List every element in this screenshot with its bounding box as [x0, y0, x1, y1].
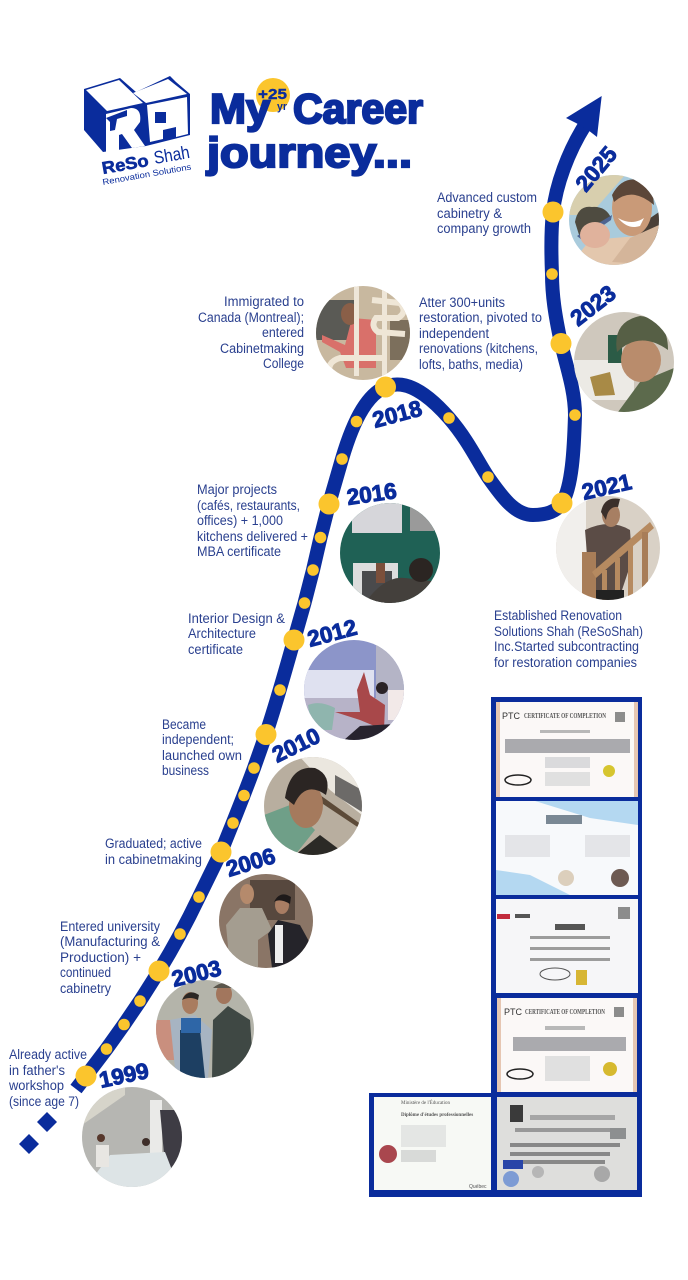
text: 2023: renovations (kitchens, — [419, 341, 538, 356]
text: 1999: (since age 7) — [9, 1094, 79, 1109]
title: Career — [293, 85, 423, 132]
certificate: Quebec diploma — [374, 1097, 491, 1190]
text: 2023 — [419, 295, 542, 372]
text: 2010 — [162, 717, 242, 778]
text: 2018: Cabinetmaking — [220, 341, 304, 356]
text: 1999 — [8, 1047, 87, 1109]
text: 2021: for restoration companies — [494, 655, 637, 670]
text: 2003: Production) + — [60, 950, 141, 965]
badge text: +25 yr: yr — [277, 101, 288, 113]
logo: ReSo — [100, 151, 150, 178]
badge circle — [256, 78, 290, 112]
text: 2023: lofts, baths, media) — [419, 357, 523, 372]
year labels: 2023 — [566, 280, 621, 331]
text: 2023: independent — [419, 326, 489, 341]
certificate: Persian diploma — [497, 1097, 637, 1190]
dashed start — [19, 1112, 57, 1154]
year labels: 2003 — [169, 955, 224, 992]
photo: 2016 — [340, 503, 440, 603]
text: 2016: Major projects — [197, 482, 277, 497]
text: 2025: cabinetry & — [437, 206, 502, 221]
text: 2012: Architecture — [188, 626, 256, 641]
text: 2016 — [197, 482, 308, 559]
badge text: +25 yr — [258, 86, 288, 113]
arrow head — [566, 96, 602, 137]
text: 2023: Atter 300+units — [419, 295, 505, 310]
photo: 2023 — [574, 312, 674, 412]
certificate: completion 1: PTC — [502, 711, 521, 721]
year labels: 2025 — [571, 142, 622, 196]
text: 2018 — [198, 294, 304, 371]
photo: 2003 — [156, 980, 254, 1078]
text: 2021: Inc.Started subcontracting — [494, 639, 639, 654]
certificate: Quebec diploma: Ministère de l'Éducation — [401, 1100, 450, 1106]
certificate: completion 2: CERTIFICATE OF COMPLETION — [525, 1008, 605, 1016]
text: 2018: Immigrated to — [224, 294, 304, 309]
text: 2006 — [105, 836, 202, 867]
text: 2003: cabinetry — [60, 981, 111, 996]
text: 2018: College — [263, 356, 304, 371]
text: 2003 — [60, 919, 160, 996]
text: 2023: restoration, pivoted to — [419, 310, 542, 325]
certificate: completion 1 — [496, 702, 638, 797]
year labels: 1999 — [97, 1058, 151, 1093]
certificate: Quebec diploma: Québec — [469, 1184, 487, 1190]
text: 2021: Solutions Shah (ReSoShah) — [494, 624, 643, 639]
photo: 1999 — [82, 1087, 182, 1187]
title: journey... — [206, 129, 412, 176]
text: 2025 — [437, 190, 537, 236]
timeline markers — [76, 202, 581, 1086]
text: 1999: workshop — [8, 1078, 64, 1093]
badge text: +25 yr: +25 — [258, 86, 287, 103]
text: 2010: independent; — [162, 732, 234, 747]
certificate: completion 1: CERTIFICATE OF COMPLETION — [524, 712, 606, 720]
text: 2016: (cafés, restaurants, — [197, 498, 300, 513]
text: 2012: Interior Design & — [188, 611, 285, 626]
text: 2010: launched own — [162, 748, 242, 763]
text: 2010: business — [162, 763, 209, 778]
photo: 2018 — [316, 286, 410, 380]
photo: 2012 — [304, 640, 404, 740]
text: 2012: certificate — [188, 642, 243, 657]
text: 2016: MBA certificate — [197, 544, 281, 559]
text: 2012 — [188, 611, 285, 657]
certificate: calligraphy — [496, 899, 638, 993]
year labels: 2010 — [268, 723, 324, 767]
text: 2025: company growth — [437, 221, 531, 236]
career path arrow — [19, 96, 602, 1154]
text: 2018: entered — [262, 325, 304, 340]
photo: 2006 — [219, 874, 313, 968]
text: 2003: continued — [60, 965, 111, 980]
certificate: Quebec diploma: Diplôme d'études professionnelles — [401, 1113, 473, 1118]
text: 2021 — [494, 608, 643, 670]
text: 2025: Advanced custom — [437, 190, 537, 205]
text: 2006: Graduated; active — [105, 836, 202, 851]
year labels: 2021 — [580, 469, 634, 505]
title — [206, 78, 423, 176]
text: 1999: Already active — [9, 1047, 87, 1062]
photo: 2010 — [264, 757, 362, 855]
logo: Shah — [152, 142, 191, 168]
text: 2016: offices) + 1,000 — [197, 513, 283, 528]
text: 1999: in father's — [9, 1063, 65, 1078]
certificate: completion 2 — [497, 998, 637, 1092]
year labels: 2018 — [370, 396, 425, 433]
text: 2018: Canada (Montreal); — [198, 310, 304, 325]
photo: 2021 — [556, 496, 660, 602]
text: 2003: (Manufacturing & — [60, 934, 160, 949]
certificate: attendance — [496, 801, 638, 895]
certificates panel — [369, 697, 642, 1197]
text: 2006: in cabinetmaking — [105, 852, 202, 867]
frame — [369, 697, 642, 1197]
year labels: 2016 — [345, 478, 398, 510]
photo: 2025 — [569, 175, 660, 265]
text: 2016: kitchens delivered + — [197, 529, 308, 544]
logo — [84, 76, 192, 187]
title: My — [210, 85, 271, 132]
text: 2003: Entered university — [60, 919, 160, 934]
certificate: completion 2: PTC — [504, 1007, 523, 1017]
year labels: 2012 — [305, 615, 360, 652]
text: 2010: Became — [162, 717, 206, 732]
year labels — [97, 142, 634, 1093]
text: 2021: Established Renovation — [494, 608, 622, 623]
logo: Renovation Solutions — [102, 161, 192, 187]
year labels: 2006 — [223, 843, 278, 882]
